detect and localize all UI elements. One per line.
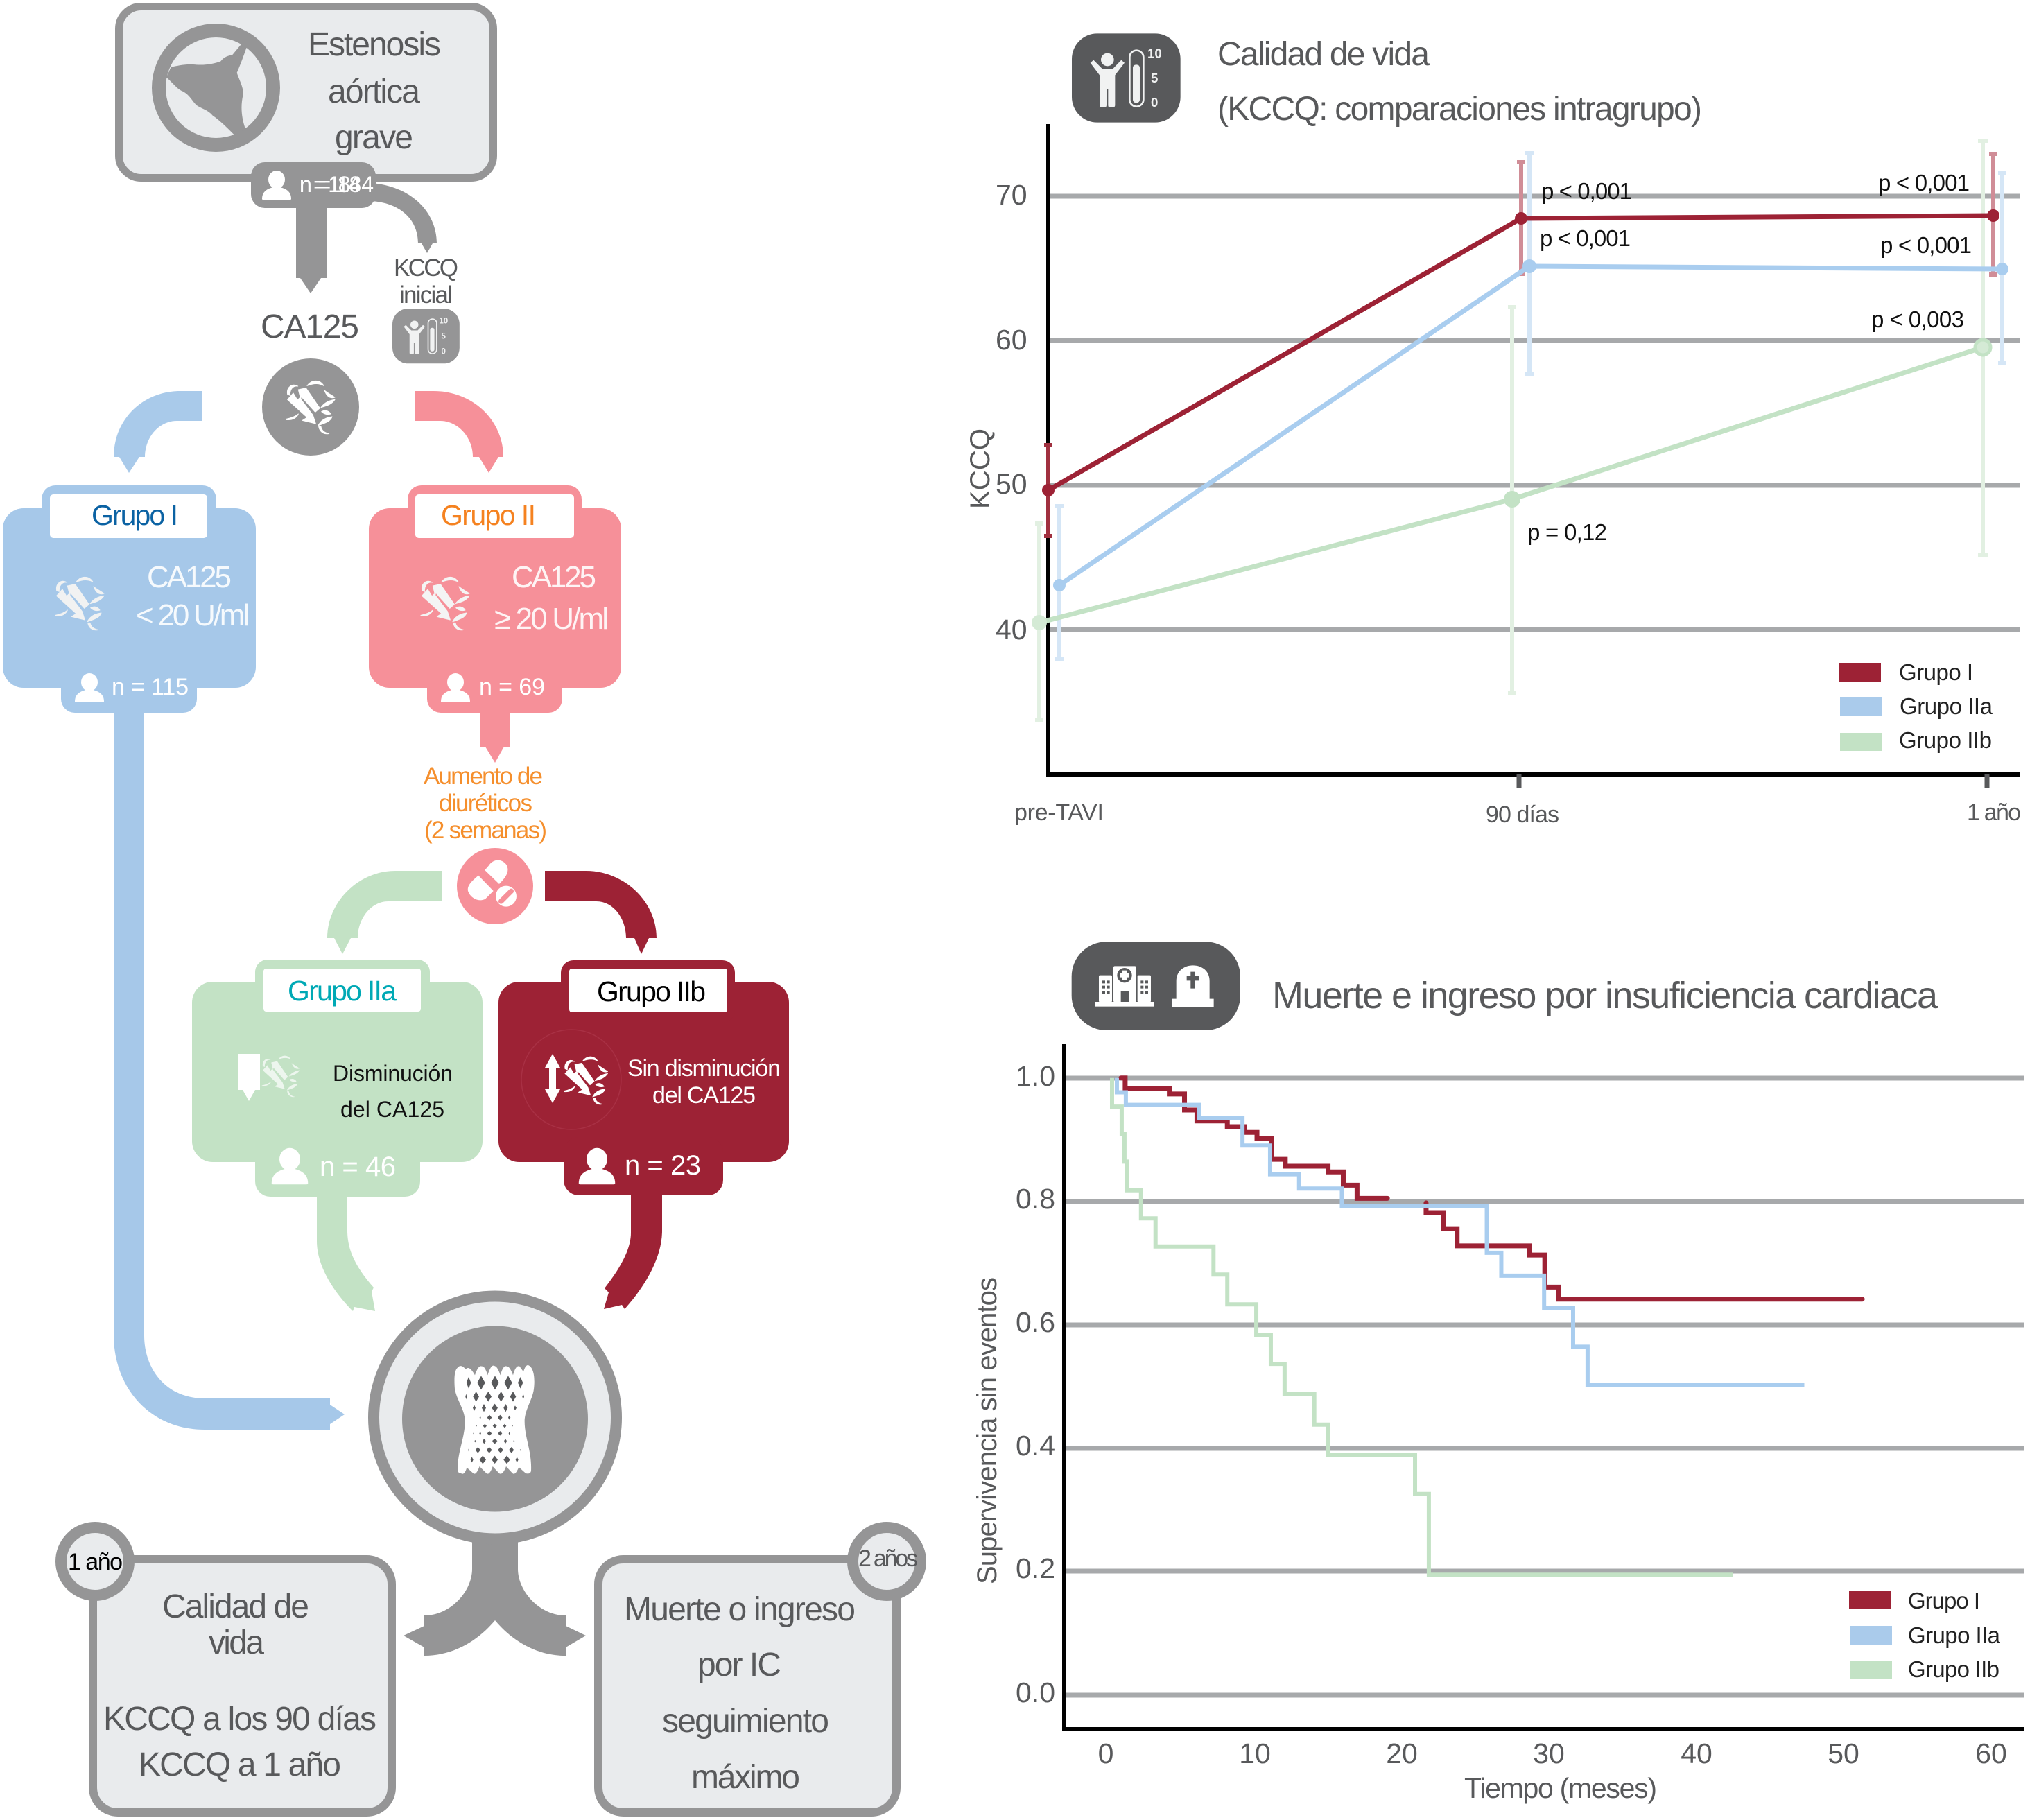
text: CA125 mayor o igual a 20: CA125	[512, 560, 596, 594]
x axis labels: pre-TAVI	[1014, 799, 1104, 826]
icon: quality of life	[1072, 33, 1181, 123]
y axis labels: 70	[996, 179, 1027, 211]
text: muerte o ingreso: seguimiento	[662, 1703, 829, 1740]
badge: n = 115	[75, 673, 189, 702]
curve: Grupo IIb	[1112, 1078, 1733, 1575]
series: Grupo I	[1042, 209, 1999, 496]
arrow: to Grupo IIa	[327, 871, 442, 954]
curve: Grupo I	[1121, 1078, 1862, 1299]
arrow: to Grupo IIb	[545, 871, 657, 954]
y axis labels	[996, 179, 1027, 645]
y axis title: KCCQ	[965, 428, 996, 509]
x axis labels: 40	[1681, 1737, 1712, 1769]
series: Grupo IIb	[1032, 340, 1990, 630]
x axis labels: 90 días	[1486, 801, 1559, 828]
text: CA125 menor de 20: < 20 U/ml	[136, 598, 250, 632]
badge: n = 46	[272, 1148, 396, 1184]
text: disminución del CA125: Disminución	[333, 1061, 453, 1086]
text: sin disminución del CA125: del CA125	[652, 1082, 756, 1109]
arrow: to KCCQ inicial	[371, 183, 437, 253]
x axis labels: 60	[1975, 1737, 2007, 1769]
legend: Grupo IIb	[1908, 1656, 1999, 1682]
heading: muerte e ingreso: Muerte e ingreso por insuficiencia cardiaca	[1272, 975, 1938, 1016]
y axis labels: 0.4	[1016, 1430, 1055, 1462]
p values: p < 0,001	[1880, 232, 1972, 258]
legend: Grupo I	[1908, 1588, 1980, 1613]
p values: p < 0,003	[1871, 306, 1964, 332]
y axis labels: 0.6	[1016, 1306, 1055, 1338]
y axis labels: 0.2	[1016, 1552, 1055, 1584]
panel: estenosis aórtica grave	[119, 7, 494, 177]
y axis labels: 0.0	[1016, 1676, 1055, 1708]
x axis labels: 20	[1386, 1737, 1418, 1769]
text: muerte o ingreso: máximo	[691, 1759, 800, 1796]
heading: Grupo I: Grupo I	[92, 499, 178, 531]
badge: n = 69	[441, 673, 545, 702]
heading: calidad de vida: (KCCQ: comparaciones intragrupo)	[1217, 91, 1702, 128]
x axis labels	[1098, 1737, 2007, 1769]
p values: p < 0,001	[1878, 170, 1970, 196]
badge: n = 184: n = 184	[300, 172, 374, 197]
arrow: Grupo II to diuréticos	[480, 707, 510, 763]
text: muerte o ingreso: Muerte o ingreso	[624, 1591, 856, 1628]
icon: TAVI stent circle	[374, 1297, 616, 1539]
legend: Grupo IIb	[1899, 727, 1992, 753]
arrow: Grupo IIa to TAVI	[317, 1193, 375, 1311]
arrow: to CA125	[296, 205, 327, 293]
x axis labels: 50	[1828, 1737, 1859, 1769]
x axis labels: 30	[1533, 1737, 1565, 1769]
text: disminución del CA125: del CA125	[340, 1097, 444, 1122]
arrow: to Grupo II	[415, 391, 503, 473]
heading: Grupo II: Grupo II	[441, 499, 536, 531]
label: CA125: CA125	[261, 309, 359, 345]
error bars	[1035, 141, 2006, 720]
text: aumento de diuréticos: Aumento de	[424, 763, 543, 790]
text: calidad de vida	[103, 1588, 376, 1783]
text: CA125 menor de 20	[136, 560, 250, 632]
icon: protein	[421, 577, 469, 630]
line chart: KCCQ	[965, 124, 2021, 828]
panel: muerte o ingreso outcome	[598, 1527, 921, 1812]
x axis labels: 10	[1239, 1737, 1271, 1769]
text: calidad de vida: Calidad de	[162, 1588, 309, 1625]
p values: p < 0,001	[1540, 225, 1631, 251]
series: Grupo IIa	[1053, 259, 2008, 591]
text: CA125 mayor o igual a 20: ≥ 20 U/ml	[494, 602, 609, 636]
heading: calidad de vida: Calidad de vida	[1217, 36, 1430, 73]
p values: p < 0,001	[1541, 178, 1632, 204]
legend: Grupo I	[1899, 659, 1973, 685]
text: CA125 menor de 20: CA125	[147, 560, 232, 594]
panel: Grupo IIa	[192, 960, 483, 1197]
text: muerte o ingreso	[624, 1591, 856, 1796]
panel: Grupo II	[369, 485, 621, 713]
y axis labels: 60	[996, 324, 1027, 356]
badge: n = 115: n = 115	[112, 674, 189, 700]
text: aumento de diuréticos: diuréticos	[439, 790, 532, 817]
badge: n = 46: n = 46	[320, 1152, 396, 1182]
heading: Grupo IIa: Grupo IIa	[288, 975, 397, 1007]
curve: Grupo IIa	[1117, 1078, 1804, 1385]
survival chart	[972, 1044, 2024, 1804]
icon: quality of life: 5	[1151, 71, 1158, 85]
icon: quality of life: 0	[1151, 95, 1158, 110]
y axis labels: 1.0	[1016, 1060, 1055, 1092]
arrows: split to outcomes	[404, 1536, 586, 1656]
arrow: Grupo IIb to TAVI	[604, 1193, 662, 1309]
badge: 2 años: 2 años	[858, 1545, 918, 1572]
badge: 1 año: 1 año	[68, 1549, 123, 1575]
icon: hospital and tombstone	[1072, 942, 1240, 1030]
text: calidad de vida: KCCQ a los 90 días	[103, 1701, 376, 1737]
icon: pills	[457, 848, 533, 924]
icon: KCCQ small: 5	[441, 333, 446, 341]
x axis labels: 1 año	[1967, 799, 2021, 826]
label: KCCQ inicial: KCCQ	[394, 254, 458, 281]
heading: estenosis aórtica grave: aórtica	[328, 73, 420, 110]
y axis labels: 40	[996, 614, 1027, 645]
icon: KCCQ small: 10	[439, 318, 448, 326]
panel: Grupo I	[3, 485, 256, 713]
y axis labels	[1016, 1060, 1055, 1708]
legend: Grupo IIa	[1900, 693, 1993, 719]
legend	[1839, 659, 1993, 753]
x axis labels: 0	[1098, 1737, 1113, 1769]
legend: Grupo IIa	[1908, 1622, 2001, 1648]
label: KCCQ inicial: inicial	[399, 281, 453, 309]
heading: calidad de vida	[1217, 36, 1702, 128]
y axis labels: 0.8	[1016, 1183, 1055, 1215]
text: calidad de vida: vida	[209, 1624, 264, 1661]
arrow: Grupo I to TAVI	[114, 707, 345, 1430]
badge: n = 69: n = 69	[479, 674, 545, 700]
heading: Grupo IIb: Grupo IIb	[597, 976, 706, 1007]
badge: 2 años	[853, 1527, 921, 1595]
icon: KCCQ small	[392, 309, 460, 363]
badge: 1 año	[61, 1527, 129, 1595]
heading: estenosis aórtica grave: grave	[335, 119, 413, 156]
icon: KCCQ small: 0	[441, 347, 446, 356]
text: aumento de diuréticos	[424, 763, 547, 844]
badge: n = 23	[579, 1148, 701, 1184]
y axis title: Supervivencia sin eventos	[972, 1277, 1003, 1584]
icon: aortic valve	[159, 31, 273, 145]
y axis labels: 50	[996, 468, 1027, 500]
x axis title: Tiempo (meses)	[1464, 1772, 1657, 1804]
icon: up-down arrow with protein	[521, 1030, 621, 1129]
panel: Grupo IIb	[498, 960, 789, 1195]
legend	[1849, 1588, 2001, 1682]
label: KCCQ inicial	[394, 254, 458, 309]
x axis labels	[1014, 799, 2021, 828]
heading: estenosis aórtica grave	[308, 26, 441, 156]
text: muerte o ingreso: por IC	[697, 1647, 781, 1683]
badge: n = 184: n = 184	[300, 172, 361, 197]
arrow: to Grupo I	[114, 391, 202, 473]
badge: n = 184	[251, 162, 376, 208]
icon: CA125 protein circle	[262, 358, 359, 456]
p values: p = 0,12	[1527, 519, 1607, 545]
panel: calidad de vida outcome	[61, 1527, 392, 1812]
badge: n = 23: n = 23	[625, 1150, 701, 1181]
text: CA125 mayor o igual a 20	[494, 560, 609, 636]
text: disminución del CA125	[333, 1061, 453, 1122]
text: calidad de vida: KCCQ a 1 año	[139, 1747, 341, 1783]
heading: estenosis aórtica grave: Estenosis	[308, 26, 441, 63]
icon: down arrow with protein	[238, 1054, 300, 1101]
text: aumento de diuréticos: (2 semanas)	[424, 817, 547, 844]
icon: protein	[55, 577, 104, 630]
text: sin disminución del CA125	[627, 1055, 781, 1109]
text: sin disminución del CA125: Sin disminución	[627, 1055, 781, 1082]
icon: quality of life: 10	[1147, 46, 1162, 60]
p values	[1527, 170, 1972, 545]
